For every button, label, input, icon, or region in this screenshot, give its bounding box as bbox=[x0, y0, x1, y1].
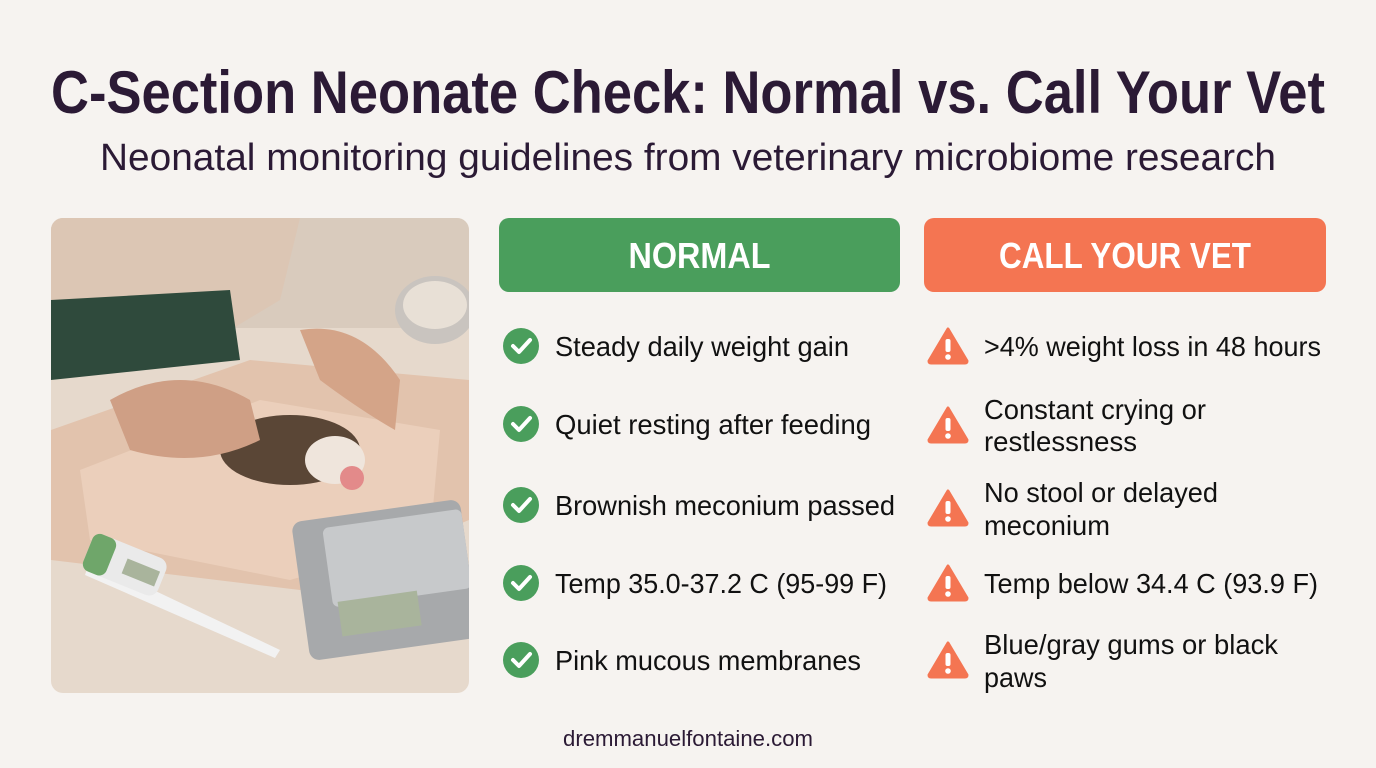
item: no stool bbox=[929, 477, 1218, 541]
item: quiet resting: Quiet resting after feeding bbox=[555, 409, 871, 440]
item: weight gain: Steady daily weight gain bbox=[555, 331, 849, 362]
header: call your vet bbox=[924, 218, 1326, 292]
item: no stool: No stool or delayed bbox=[984, 477, 1218, 508]
photo: puppy on towel with scale and thermometer bbox=[51, 218, 479, 693]
item: crying: restlessness bbox=[984, 426, 1137, 457]
item: gums bbox=[929, 629, 1279, 693]
subtitle: Neonatal monitoring guidelines from veterinary microbiome research bbox=[100, 137, 1276, 179]
normal list bbox=[503, 328, 895, 678]
item: crying: Constant crying or bbox=[984, 394, 1206, 425]
footer: dremmanuelfontaine.com bbox=[563, 726, 813, 751]
header: normal bbox=[499, 218, 900, 292]
item: gums: Blue/gray gums or black bbox=[984, 629, 1279, 660]
item: temperature: Temp 35.0-37.2 C (95-99 F) bbox=[555, 568, 887, 599]
vet list bbox=[929, 329, 1321, 693]
item: no stool: meconium bbox=[984, 510, 1110, 541]
item: gums: paws bbox=[984, 662, 1047, 693]
item: weight loss: >4% weight loss in 48 hours bbox=[984, 331, 1321, 362]
header: normal: NORMAL bbox=[628, 235, 770, 276]
item: low temperature: Temp below 34.4 C (93.9 F) bbox=[984, 568, 1318, 599]
item: crying bbox=[929, 394, 1206, 457]
header: call your vet: CALL YOUR VET bbox=[999, 235, 1251, 276]
item: membranes: Pink mucous membranes bbox=[555, 645, 861, 676]
item: meconium: Brownish meconium passed bbox=[555, 490, 895, 521]
